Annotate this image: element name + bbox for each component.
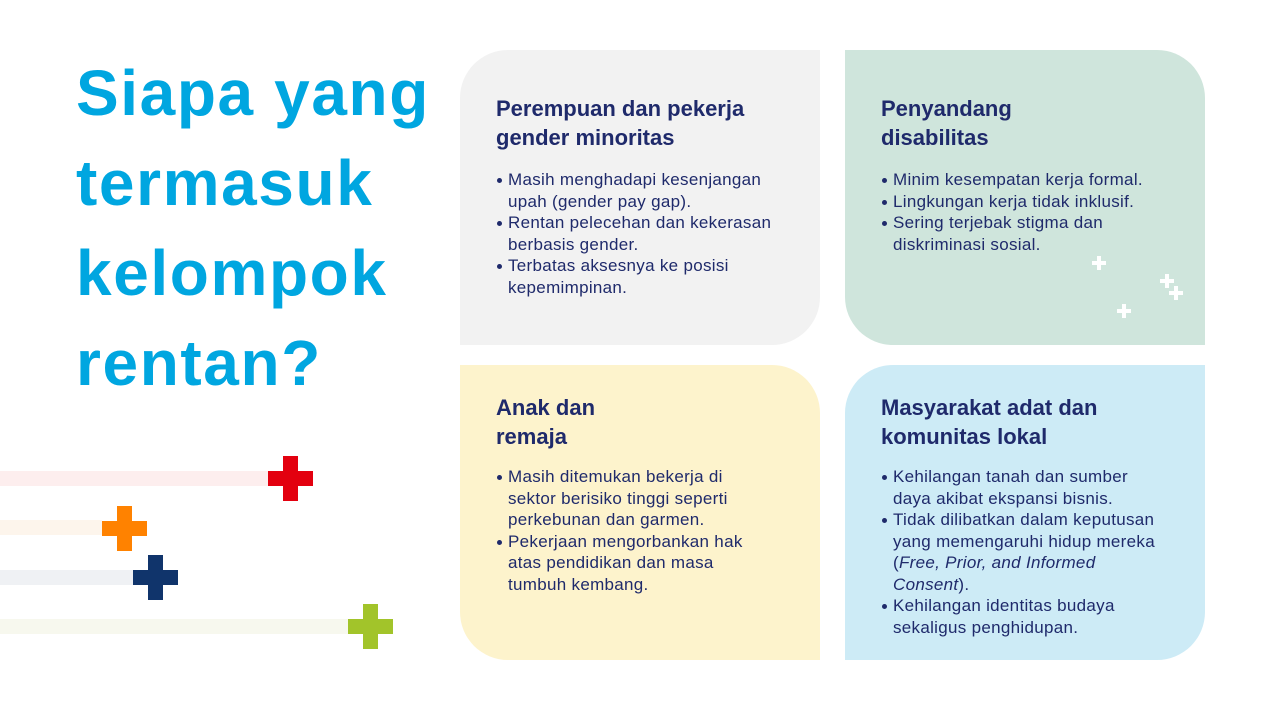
- heading: perempuan: Perempuan dan pekerja: [496, 96, 744, 121]
- bullets: masyarakat adat: [882, 467, 1155, 636]
- bullets: masyarakat adat: Kehilangan identitas budaya: [893, 596, 1115, 615]
- panel: perempuan: [460, 50, 820, 345]
- panel: disabilitas: [845, 50, 1205, 345]
- heading: masyarakat adat: Masyarakat adat dan: [881, 395, 1097, 420]
- decoration: red bar and plus: [0, 456, 313, 501]
- heading: masyarakat adat: komunitas lokal: [881, 424, 1047, 449]
- bullets: masyarakat adat: daya akibat ekspansi bisnis.: [893, 488, 1113, 508]
- heading: perempuan: [496, 96, 744, 150]
- bullets: disabilitas: Sering terjebak stigma dan: [893, 213, 1103, 232]
- bullets: masyarakat adat: sekaligus penghidupan.: [893, 618, 1078, 636]
- heading: disabilitas: Penyandang: [881, 96, 1012, 121]
- heading: anak: [496, 395, 595, 449]
- bullets: anak: atas pendidikan dan masa: [508, 553, 714, 572]
- bullets: masyarakat adat: yang memengaruhi hidup mereka: [893, 532, 1155, 550]
- bullets: masyarakat adat: Tidak dilibatkan dalam keputusan: [893, 510, 1154, 529]
- bullets: anak: Pekerjaan mengorbankan hak: [508, 532, 743, 550]
- heading: masyarakat adat: [881, 395, 1097, 449]
- decoration: navy bar and plus: [0, 555, 178, 600]
- heading: perempuan: gender minoritas: [496, 125, 674, 150]
- bullets: anak: perkebunan dan garmen.: [508, 510, 705, 529]
- bullets: masyarakat adat: Consent).: [893, 574, 969, 594]
- title: rentan?: [76, 327, 322, 399]
- decoration: orange bar and plus: [0, 506, 147, 551]
- heading: anak: Anak dan: [496, 395, 595, 420]
- bullets: perempuan: Masih menghadapi kesenjangan: [508, 170, 761, 189]
- heading: disabilitas: [881, 96, 1012, 150]
- bullets: perempuan: Terbatas aksesnya ke posisi: [508, 256, 729, 275]
- bullets: perempuan: upah (gender pay gap).: [508, 192, 691, 210]
- bullets: disabilitas: diskriminasi sosial.: [893, 234, 1041, 254]
- icon: sparkle crosses: [1092, 256, 1183, 318]
- panel: masyarakat adat: [845, 365, 1205, 660]
- bullets: anak: tumbuh kembang.: [508, 574, 649, 594]
- bullets: disabilitas: Lingkungan kerja tidak inklusif.: [893, 192, 1134, 210]
- title: Siapa yang: [76, 57, 430, 129]
- heading: disabilitas: disabilitas: [881, 125, 989, 150]
- bullets: perempuan: [497, 170, 771, 296]
- bullets: disabilitas: [882, 170, 1143, 254]
- title: [76, 57, 430, 399]
- title: kelompok: [76, 237, 388, 309]
- bullets: anak: Masih ditemukan bekerja di: [508, 467, 723, 486]
- bullets: disabilitas: Minim kesempatan kerja formal.: [893, 170, 1143, 189]
- bullets: masyarakat adat: Kehilangan tanah dan sumber: [893, 467, 1128, 486]
- bullets: anak: sektor berisiko tinggi seperti: [508, 488, 728, 508]
- bullets: anak: [497, 467, 743, 594]
- bullets: masyarakat adat: (Free, Prior, and Informed: [893, 553, 1095, 572]
- panel: anak: [460, 365, 820, 660]
- decoration: green bar and plus: [0, 604, 393, 649]
- bullets: perempuan: Rentan pelecehan dan kekerasan: [508, 213, 771, 232]
- bullets: perempuan: kepemimpinan.: [508, 278, 627, 296]
- heading: anak: remaja: [496, 424, 567, 449]
- title: termasuk: [76, 147, 373, 219]
- bullets: perempuan: berbasis gender.: [508, 234, 638, 254]
